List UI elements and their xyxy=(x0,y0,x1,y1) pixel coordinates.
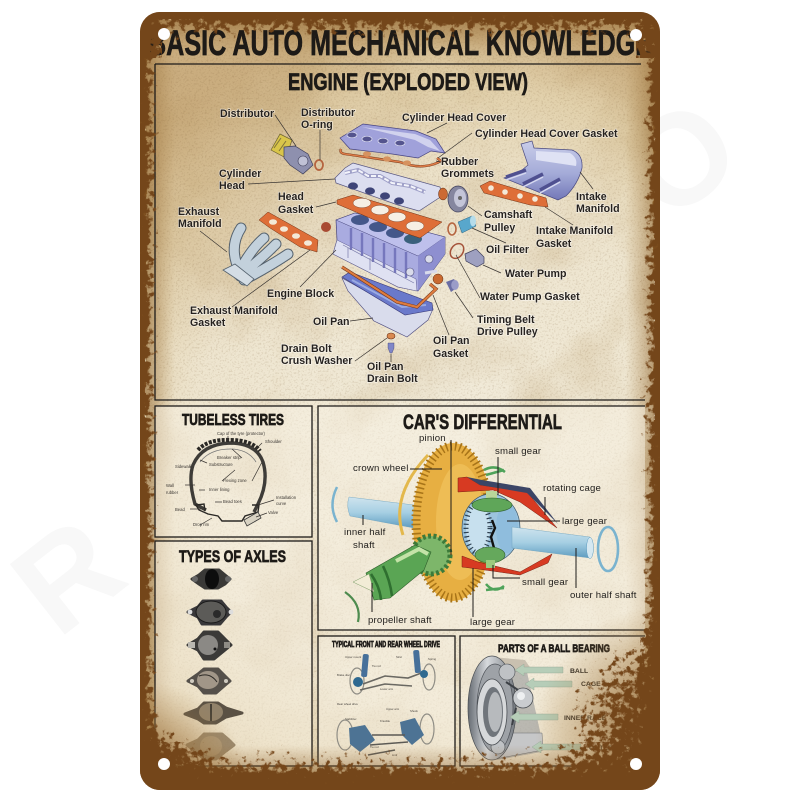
cylinder head cover xyxy=(340,124,445,158)
schematic labels: Link xyxy=(392,753,398,757)
engine part labels: Head xyxy=(219,180,245,192)
bearing labels: BALL xyxy=(570,668,588,675)
intake manifold xyxy=(504,141,582,200)
engine block xyxy=(333,213,445,291)
engine part labels: Intake Manifold xyxy=(536,225,613,237)
engine part labels: Gasket xyxy=(536,238,572,250)
heading: ball bearing: PARTS OF A BALL BEARING xyxy=(498,643,610,655)
engine part labels: Gasket xyxy=(190,317,226,329)
engine illustration xyxy=(223,124,582,353)
schematic labels: Tie rod xyxy=(372,664,381,668)
engine part labels: Distributor xyxy=(301,107,355,119)
tire labels: Bead xyxy=(175,507,185,512)
infographic: basic auto mechanical knowledge sign xyxy=(140,12,660,790)
engine part labels: Intake xyxy=(576,191,607,203)
plug xyxy=(321,222,331,232)
tire labels: Cap of the tyre (protector) xyxy=(217,431,266,436)
engine part labels: Water Pump Gasket xyxy=(480,291,580,303)
leader lines xyxy=(200,115,593,362)
engine part labels: Cylinder Head Cover xyxy=(402,112,506,124)
axle 4 xyxy=(188,669,230,693)
heading: wheel drive: TYPICAL FRONT AND REAR WHEEL DRIVE xyxy=(332,640,440,649)
schematic labels: Tie rod xyxy=(370,745,379,749)
schematic labels: Lower arm xyxy=(380,687,394,691)
bearing labels: OUTER RACE xyxy=(589,745,634,752)
engine part labels: Drive Pulley xyxy=(477,326,538,338)
engine part labels: Cylinder xyxy=(219,168,261,180)
differential labels: shaft xyxy=(353,540,375,551)
propeller shaft and pinion xyxy=(345,535,450,622)
differential labels: large gear xyxy=(470,617,516,628)
differential labels: small gear xyxy=(495,446,542,457)
tire labels: curve xyxy=(276,501,287,506)
engine part labels: Pulley xyxy=(484,222,515,234)
head gasket xyxy=(337,195,442,238)
heading: types of axles: TYPES OF AXLES xyxy=(179,548,286,566)
metal sign plate with aged paper xyxy=(140,12,660,790)
schematic labels: Strut xyxy=(396,655,402,659)
engine part labels: Engine Block xyxy=(267,288,334,300)
oil pan drain bolt xyxy=(388,343,394,353)
panel: typical front and rear wheel drive xyxy=(318,636,455,766)
axle housings xyxy=(185,569,242,759)
schematic labels: Knuckle xyxy=(380,719,390,723)
differential labels: propeller shaft xyxy=(368,615,432,626)
differential illustration xyxy=(332,443,618,622)
engine part labels: Oil Pan xyxy=(433,335,470,347)
tire labels: Flexing zone xyxy=(223,478,247,483)
differential labels: rotating cage xyxy=(543,483,601,494)
engine part labels: Drain Bolt xyxy=(281,343,332,355)
engine part labels: Gasket xyxy=(278,204,314,216)
tire labels: Breaker strip xyxy=(217,455,241,460)
oil filter xyxy=(448,216,476,235)
tire labels: Bead toes xyxy=(223,499,242,504)
oil seal xyxy=(433,274,443,284)
schematic labels: Stabilizer xyxy=(345,717,357,721)
rotating cage xyxy=(458,477,558,575)
bearing labels: CAGE xyxy=(581,681,601,688)
bearing pointer arrows xyxy=(510,664,581,753)
intake manifold gasket xyxy=(480,181,548,207)
differential labels xyxy=(344,433,637,628)
cylinder head cover gasket xyxy=(340,149,441,166)
tire labels: Installation xyxy=(276,495,297,500)
mounting holes xyxy=(158,28,642,770)
engine part labels: Camshaft xyxy=(484,209,533,221)
differential labels: outer half shaft xyxy=(570,590,637,601)
schematic labels: Shock xyxy=(410,709,418,713)
engine part labels: Distributor xyxy=(220,108,274,120)
axle 6 xyxy=(187,734,234,759)
small gears xyxy=(472,467,512,590)
exhaust manifold xyxy=(223,228,288,286)
timing belt drive pulley xyxy=(446,279,459,292)
bearing illustration xyxy=(468,656,543,760)
heading: tubeless tires: TUBELESS TIRES xyxy=(182,412,284,429)
engine part labels: Gasket xyxy=(433,348,469,360)
schematic labels: Upper mount xyxy=(345,655,361,659)
camshaft pulley xyxy=(448,186,468,212)
schematic labels: Upper arm xyxy=(386,707,400,711)
heading: engine: ENGINE (EXPLODED VIEW) xyxy=(288,69,528,96)
engine part labels: Oil Pan xyxy=(313,316,350,328)
inner half shaft xyxy=(332,487,414,528)
tire labels: Substructure xyxy=(209,462,233,467)
front drive schematic xyxy=(350,650,435,694)
drain bolt washer xyxy=(387,333,395,339)
panel: types of axles xyxy=(155,541,312,766)
outer half shaft xyxy=(512,527,618,571)
panel: engine exploded view xyxy=(155,64,645,400)
engine part labels: Manifold xyxy=(576,203,620,215)
exhaust manifold gasket xyxy=(259,212,318,252)
tire labels: Drop rim xyxy=(193,522,210,527)
panel: parts of a ball bearing xyxy=(460,636,645,766)
engine part labels: O-ring xyxy=(301,119,333,131)
engine part labels: Exhaust Manifold xyxy=(190,305,278,317)
differential labels: inner half xyxy=(344,527,386,538)
engine part labels: Manifold xyxy=(178,218,222,230)
axle 2 xyxy=(188,601,233,624)
differential labels: large gear xyxy=(562,516,608,527)
distributor xyxy=(271,134,313,174)
axle 1 xyxy=(192,569,231,589)
oil pan xyxy=(342,272,433,337)
rust and wear overlay xyxy=(140,12,660,790)
rear drive schematic xyxy=(337,714,434,755)
soft rust stains at lower corners xyxy=(140,605,660,790)
tire labels xyxy=(166,431,297,527)
tire labels: Sidewall xyxy=(175,464,191,469)
schematic labels xyxy=(337,655,437,757)
distributor o-ring xyxy=(315,160,323,170)
heading: car's differential: CAR'S DIFFERENTIAL xyxy=(403,410,562,434)
water pump gasket xyxy=(447,241,467,261)
water pump xyxy=(465,249,484,267)
tire labels: Wall xyxy=(166,483,174,488)
engine part labels: Crush Washer xyxy=(281,355,352,367)
differential labels: crown wheel xyxy=(353,463,409,474)
engine part labels xyxy=(178,107,620,385)
tire labels: rubber xyxy=(166,490,179,495)
panel: tubeless tires xyxy=(155,406,312,537)
axle 3 xyxy=(188,632,231,659)
tire labels: Valve xyxy=(268,510,279,515)
differential leader lines xyxy=(363,440,576,617)
schematic labels: Brake disc xyxy=(337,673,351,677)
engine part labels: Oil Filter xyxy=(486,244,529,256)
oil pan gasket xyxy=(342,267,436,307)
engine part labels: Drain Bolt xyxy=(367,373,418,385)
schematic labels: Rear wheel drive xyxy=(337,702,358,706)
engine part labels: Rubber xyxy=(441,156,478,168)
engine part labels: Grommets xyxy=(441,168,494,180)
tire cross-section xyxy=(191,440,265,526)
axle 5 xyxy=(185,703,242,723)
differential labels: pinion xyxy=(419,433,446,444)
engine part labels: Head xyxy=(278,191,304,203)
crown wheel xyxy=(400,443,493,601)
engine part labels: Water Pump xyxy=(505,268,567,280)
tire labels: Inner lining xyxy=(209,487,230,492)
engine part labels: Oil Pan xyxy=(367,361,404,373)
tire labels: Shoulder xyxy=(265,439,282,444)
schematic labels: Spring xyxy=(428,657,437,661)
engine part labels: Timing Belt xyxy=(477,314,535,326)
engine part labels: Exhaust xyxy=(178,206,220,218)
gear hub xyxy=(462,494,520,562)
watermark letters: O xyxy=(595,70,765,247)
bearing labels: INNER RACE xyxy=(564,715,607,722)
cylinder head xyxy=(335,163,448,211)
bearing labels xyxy=(564,668,634,752)
watermark letters xyxy=(0,70,765,662)
engine part labels: Cylinder Head Cover Gasket xyxy=(475,128,618,140)
panel: car's differential xyxy=(318,406,645,630)
differential labels: small gear xyxy=(522,577,569,588)
